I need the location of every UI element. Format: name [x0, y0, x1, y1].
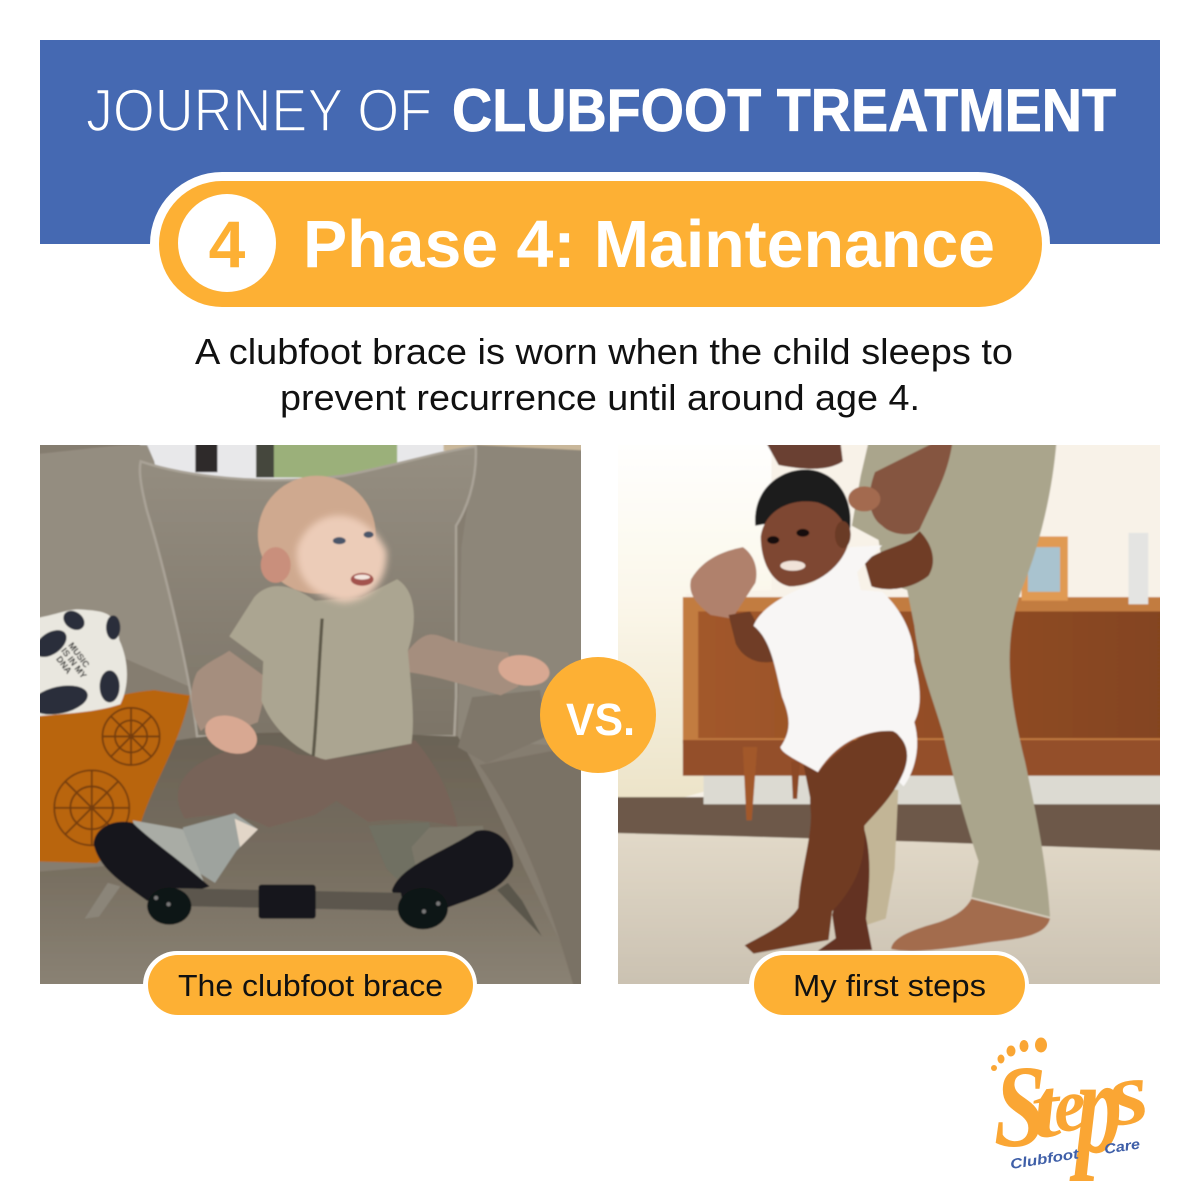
VS badge: VS.	[566, 694, 635, 745]
baby trousers	[185, 741, 440, 778]
right foot in shoe	[391, 826, 541, 936]
left foot in shoe	[85, 813, 258, 919]
adult trousers	[852, 433, 1057, 917]
phase pill	[150, 172, 1050, 316]
bright window and curtain	[611, 433, 771, 801]
logo subtitle: Care	[1103, 1135, 1141, 1157]
jacket zip	[313, 619, 322, 756]
photo: toddler taking first steps	[611, 433, 1169, 994]
title	[86, 77, 1116, 144]
title: CLUBFOOT TREATMENT	[452, 77, 1116, 144]
white printed cushion: IS IN MY	[59, 646, 89, 680]
logo: Steps Clubfoot Care	[991, 1032, 1154, 1182]
sofa seat	[40, 732, 541, 926]
toddler arms	[729, 486, 933, 662]
VS badge	[540, 657, 656, 773]
small throw cushion right	[458, 690, 544, 752]
white printed cushion	[40, 608, 128, 718]
sofa centre cushion	[140, 446, 476, 736]
logo wordmark: p	[1069, 1032, 1122, 1182]
sofa right arm	[481, 752, 581, 984]
logo wordmark: s	[1100, 1042, 1154, 1146]
adult right hand	[870, 445, 953, 535]
adult foot	[891, 899, 1050, 951]
logo toes	[991, 1038, 1047, 1071]
baby head	[258, 476, 387, 602]
description text: prevent recurrence until around age 4.	[280, 377, 920, 418]
phase heading: Phase 4: Maintenance	[303, 207, 995, 282]
baby hands	[200, 652, 551, 761]
orange patterned pillow	[33, 690, 190, 863]
logo wordmark: t	[1026, 1061, 1067, 1157]
toddler onesie	[754, 545, 920, 786]
logo subtitle: Clubfoot	[1009, 1145, 1081, 1172]
sideboard	[683, 597, 1169, 820]
picture frame and vase	[1021, 533, 1148, 604]
phase number badge: 4	[209, 207, 246, 281]
caption: my first steps: My first steps	[793, 968, 986, 1003]
description text	[195, 331, 1013, 418]
caption: my first steps	[749, 951, 1029, 1019]
toddler legs	[745, 731, 907, 954]
white printed cushion: DNA	[54, 654, 74, 676]
caption: the clubfoot brace	[143, 951, 477, 1019]
title: JOURNEY OF	[86, 77, 432, 144]
logo wordmark: e	[1049, 1062, 1090, 1149]
baby jacket sleeves	[191, 634, 519, 731]
background wall	[140, 445, 581, 480]
phase number badge	[178, 194, 276, 292]
logo wordmark: S	[994, 1041, 1046, 1172]
rug	[611, 833, 1168, 994]
adult arm top	[766, 445, 844, 470]
description text: A clubfoot brace is worn when the child sleeps to	[195, 331, 1013, 372]
photo: baby wearing clubfoot brace on sofa	[29, 433, 590, 994]
toddler head	[755, 470, 851, 586]
logo wordmark	[994, 1032, 1154, 1182]
sofa right back cushion	[458, 445, 590, 747]
adult left hand	[690, 547, 756, 619]
white printed cushion: MUSIC	[66, 641, 92, 670]
skirting	[704, 772, 1168, 804]
floor	[611, 797, 1168, 851]
caption: the clubfoot brace: The clubfoot brace	[178, 968, 443, 1003]
baby jacket body	[229, 579, 414, 760]
brace bar with clamps	[147, 885, 448, 929]
logo subtitle	[1009, 1135, 1141, 1172]
sofa left back cushion	[40, 445, 188, 686]
header banner	[40, 40, 1160, 244]
adult back foot and leg	[863, 789, 899, 925]
